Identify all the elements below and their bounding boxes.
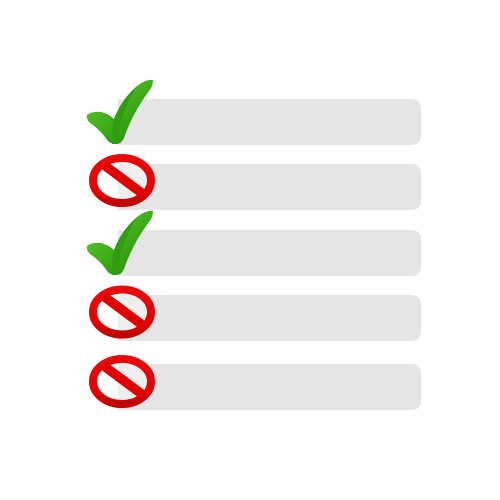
row bar 5 [118,364,421,410]
icon: red prohibition sign row 5 [93,359,151,404]
row bar 1 [118,99,421,145]
icon: red prohibition sign row 2 [93,158,151,203]
icon: green check mark row 3 [87,211,153,275]
row bar 3 [118,230,421,276]
icon: red prohibition sign row 4 [93,290,151,334]
icon: green check mark row 1 [87,80,153,144]
row bar 2 [118,164,421,210]
row bar 4 [118,295,421,341]
